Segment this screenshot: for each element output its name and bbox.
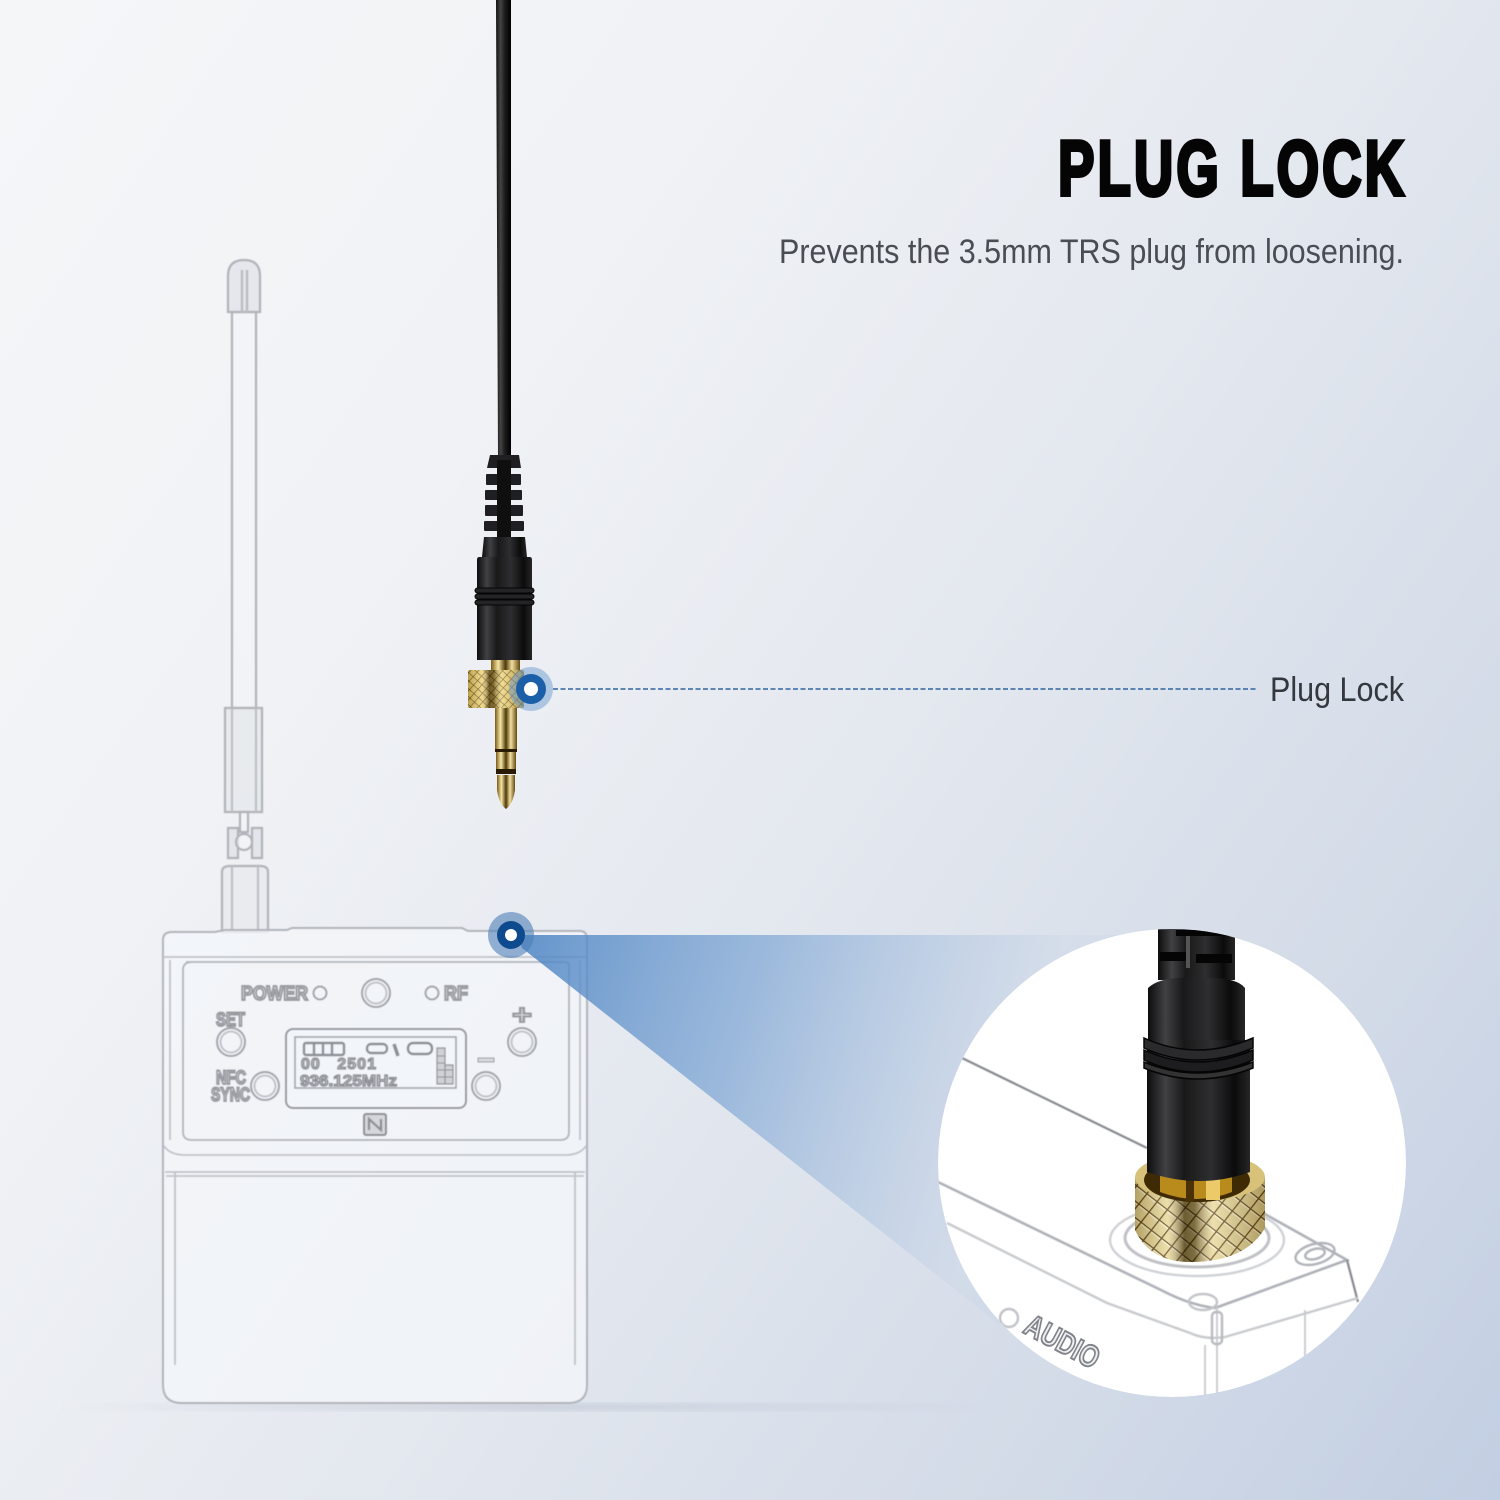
label: Plug Lock: Plug Lock [1270, 671, 1405, 709]
marker: plug lock [509, 667, 553, 711]
inset circle [938, 925, 1406, 1400]
transmitter device line art [163, 928, 587, 1403]
cable [496, 0, 511, 456]
device labels: SYNC [211, 1085, 250, 1106]
marker: device socket [488, 912, 534, 958]
device labels: + [512, 999, 532, 1030]
device screen [286, 1029, 466, 1108]
device labels: SET [216, 1010, 245, 1031]
barrel rings [475, 588, 534, 605]
device body [163, 928, 587, 1403]
3.5mm plug [495, 708, 517, 809]
icon: NFC mark [364, 1114, 386, 1135]
device labels: POWER [241, 983, 308, 1005]
microphone cable and plug [468, 0, 534, 809]
device screen: 00 2501 [301, 1056, 376, 1073]
device seams [163, 957, 587, 1365]
leader line [553, 688, 1258, 690]
subtitle: Prevents the 3.5mm TRS plug from loosening. [779, 233, 1404, 271]
gold pins [491, 660, 520, 672]
device labels [211, 983, 532, 1106]
title: PLUG LOCK [1058, 125, 1407, 212]
strain relief [482, 455, 527, 557]
device labels: RF [444, 983, 468, 1005]
inset AUDIO label: AUDIO [1019, 1307, 1106, 1376]
knurled plug lock [468, 670, 524, 708]
callout beam [518, 935, 1160, 1325]
black barrel [477, 557, 532, 660]
antenna line art [222, 260, 268, 932]
inset device line art [938, 1058, 1358, 1400]
device labels: NFC [216, 1068, 246, 1089]
device controls [217, 979, 536, 1100]
inset black plug body [1144, 925, 1253, 1181]
device screen: 936.125MHz [300, 1073, 397, 1090]
inset gold collar [1135, 1153, 1265, 1262]
floor shadow [60, 1403, 1010, 1411]
